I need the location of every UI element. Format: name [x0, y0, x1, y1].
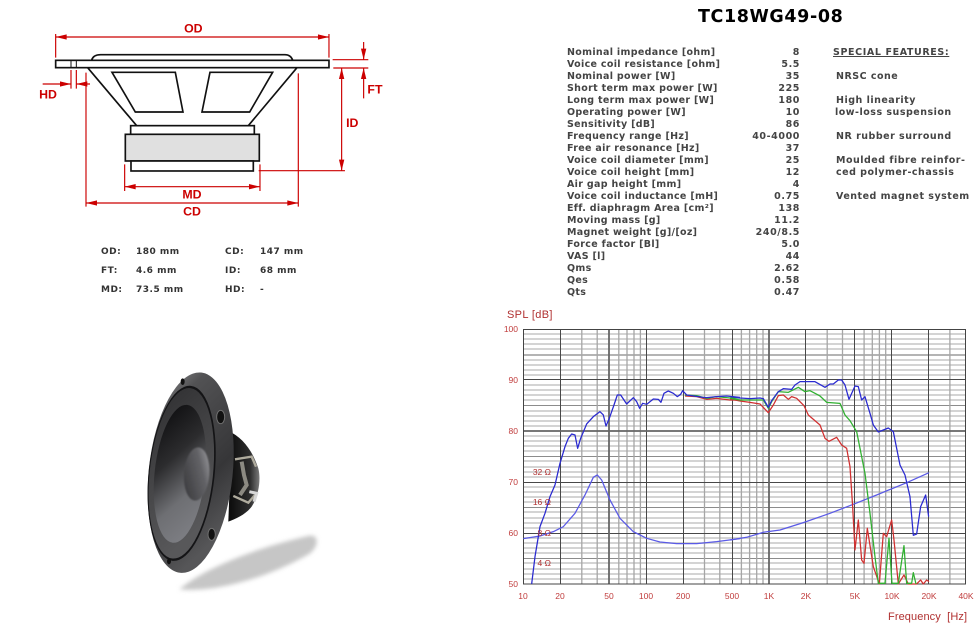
dimensions table: 68 mm [260, 266, 297, 276]
special features: Moulded fibre reinfor- [836, 155, 965, 166]
x axis labels: 500 [725, 591, 739, 601]
specifications table: Force factor [Bl] [567, 239, 660, 250]
specifications table: Free air resonance [Hz] [567, 143, 700, 154]
dust cap [182, 447, 211, 501]
dimension letters: CD [183, 205, 201, 219]
curves left half [523, 391, 740, 584]
impedance labels: 32 Ω [533, 467, 551, 477]
dimension letters [39, 22, 383, 219]
special features: High linearity [836, 95, 916, 106]
specifications table: Qes [567, 275, 588, 286]
dimensions table [101, 247, 304, 295]
y axis title: SPL [dB] [507, 309, 553, 321]
special features: low-loss suspension [835, 107, 952, 118]
specifications table: 5.5 [781, 59, 800, 70]
dimensions table: CD: [225, 247, 244, 257]
specifications table: 8 [793, 47, 800, 58]
y axis labels: 100 [504, 324, 518, 334]
x axis labels: 1K [764, 591, 775, 601]
specifications table: Sensitivity [dB] [567, 119, 655, 130]
cone assembly [140, 382, 224, 564]
dimensions table: 180 mm [136, 247, 180, 257]
special features: Vented magnet system [836, 191, 970, 202]
specifications table: 37 [786, 143, 800, 154]
shadow [179, 536, 317, 590]
specifications table: 44 [786, 251, 800, 262]
x axis labels: 5K [850, 591, 861, 601]
specifications table: 25 [786, 155, 800, 166]
special features: ced polymer-chassis [836, 167, 954, 178]
specifications table [567, 47, 800, 298]
specifications table: Nominal impedance [ohm] [567, 47, 715, 58]
x axis labels: 50 [604, 591, 614, 601]
specifications table: Eff. diaphragm Area [cm²] [567, 203, 714, 214]
specifications table: Nominal power [W] [567, 71, 676, 82]
specifications table: 12 [786, 167, 800, 178]
title: TC18WG49-08 [698, 7, 843, 27]
specifications table: Air gap height [mm] [567, 179, 681, 190]
x axis labels [518, 591, 974, 601]
red dimension lines and arrows [43, 34, 368, 207]
x axis labels: 20 [555, 591, 565, 601]
dimensions table: 73.5 mm [136, 285, 184, 295]
impedance labels: 16 Ω [533, 497, 551, 507]
speaker cross-section outline [56, 55, 329, 171]
specifications table: Qts [567, 287, 586, 298]
specifications table: 240/8.5 [756, 227, 800, 238]
dimensions table: - [260, 285, 264, 295]
dimension letters: FT [367, 83, 383, 97]
x axis labels: 10K [884, 591, 900, 601]
grid [523, 329, 966, 584]
dimensions table: 147 mm [260, 247, 304, 257]
specifications table: 225 [778, 83, 800, 94]
dimensions table: HD: [225, 285, 245, 295]
specifications table: Short term max power [W] [567, 83, 718, 94]
specifications table: Voice coil inductance [mH] [567, 191, 718, 202]
specifications table: 2.62 [774, 263, 800, 274]
special features [833, 47, 970, 202]
impedance labels [533, 467, 551, 568]
x axis labels: 2K [801, 591, 812, 601]
specifications table: 0.47 [774, 287, 800, 298]
special features: NRSC cone [836, 71, 898, 82]
dimension letters: ID [346, 116, 359, 130]
y axis labels: 60 [509, 528, 518, 538]
specifications table: 11.2 [774, 215, 800, 226]
dimensions table: 4.6 mm [136, 266, 177, 276]
x axis labels: 100 [639, 591, 653, 601]
specifications table: Magnet weight [g]/[oz] [567, 227, 697, 238]
special features: SPECIAL FEATURES: [833, 47, 949, 58]
specifications table: 4 [793, 179, 800, 190]
x axis labels: 20K [921, 591, 937, 601]
impedance labels: 8 Ω [538, 528, 551, 538]
x axis title: Frequency [Hz] [888, 611, 967, 623]
dimensions table: OD: [101, 247, 121, 257]
x axis labels: 40K [958, 591, 974, 601]
specifications table: Operating power [W] [567, 107, 686, 118]
dimensions table: FT: [101, 266, 118, 276]
y axis labels: 90 [509, 375, 518, 385]
frame flange [138, 368, 243, 577]
specifications table: Long term max power [W] [567, 95, 714, 106]
specifications table: 10 [786, 107, 800, 118]
specifications table: 0.75 [774, 191, 800, 202]
curves right half [730, 380, 929, 584]
dimension letters: OD [184, 22, 203, 36]
y axis labels: 80 [509, 426, 518, 436]
specifications table: Voice coil resistance [ohm] [567, 59, 720, 70]
specifications table: Voice coil height [mm] [567, 167, 694, 178]
specifications table: 138 [778, 203, 800, 214]
x axis labels: 10 [518, 591, 528, 601]
specifications table: 35 [786, 71, 800, 82]
specifications table: VAS [l] [567, 251, 605, 262]
specifications table: Qms [567, 263, 592, 274]
dimension letters: HD [39, 88, 57, 102]
impedance labels: 4 Ω [538, 558, 551, 568]
terminals [233, 457, 257, 503]
specifications table: 5.0 [781, 239, 800, 250]
specifications table: 180 [778, 95, 800, 106]
specifications table: 40-4000 [752, 131, 800, 142]
specifications table: 0.58 [774, 275, 800, 286]
y axis labels: 70 [509, 477, 518, 487]
specifications table: 86 [786, 119, 800, 130]
specifications table: Frequency range [Hz] [567, 131, 689, 142]
specifications table: Moving mass [g] [567, 215, 661, 226]
mounting holes [167, 378, 225, 564]
special features: NR rubber surround [836, 131, 952, 142]
y axis labels [504, 324, 518, 589]
magnet and back [228, 433, 259, 522]
specifications table: Voice coil diameter [mm] [567, 155, 709, 166]
x axis labels: 200 [676, 591, 690, 601]
dimensions table: MD: [101, 285, 123, 295]
y axis labels: 50 [509, 579, 518, 589]
dimension letters: MD [182, 188, 202, 202]
dimensions table: ID: [225, 266, 241, 276]
